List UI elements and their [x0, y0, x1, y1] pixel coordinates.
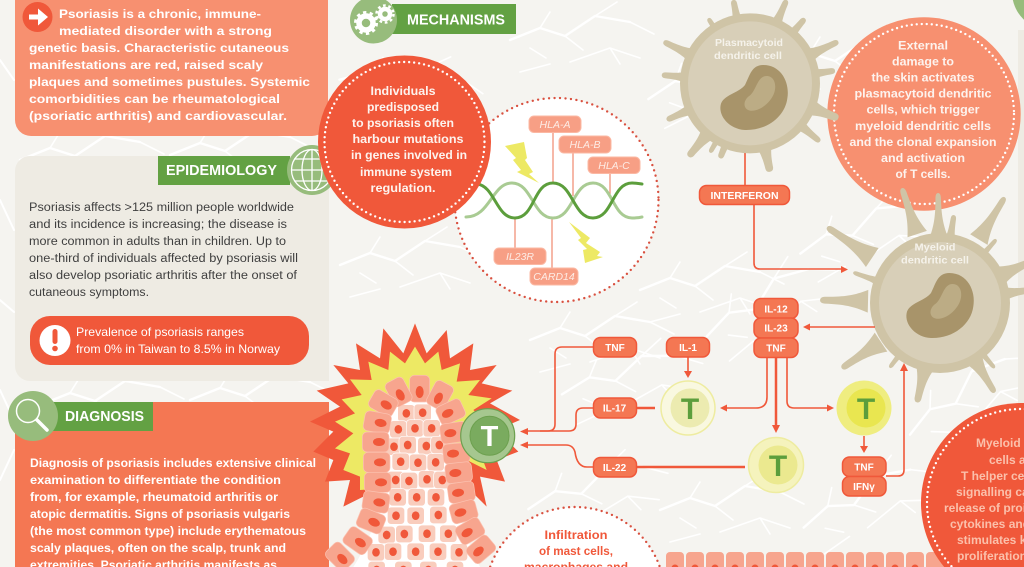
- icon: globe: [287, 145, 337, 195]
- callout: external damage: and activation: [881, 151, 965, 165]
- intro text: [29, 7, 310, 123]
- icon: magnifier: [8, 391, 58, 441]
- cytokine labels: TNF: [766, 344, 786, 354]
- T cell: bright: [836, 380, 892, 436]
- callout: external damage: [827, 17, 1021, 211]
- cytokine labels: [594, 298, 886, 496]
- gene labels: HLA-A: [540, 119, 570, 131]
- panel: diagnosis: [15, 402, 329, 567]
- callout: external damage: cells, which trigger: [866, 102, 980, 116]
- epidemiology text: Psoriasis affects >125 million people worldwide: [29, 202, 294, 214]
- skin layer: bottom row: [666, 552, 944, 567]
- cytokine labels: IL-23: [764, 324, 788, 334]
- epidemiology text: also develop psoriatic arthritis after the onset of: [29, 270, 298, 282]
- T cell: medium: [748, 438, 804, 492]
- gene labels: HLA-C: [598, 160, 630, 172]
- callout: prevalence: [30, 316, 309, 365]
- myeloid dendritic cell: Myeloid: [914, 242, 956, 254]
- intro text: genetic basis. Characteristic cutaneous: [29, 41, 289, 55]
- plasmacytoid dendritic cell: dendritic cell: [714, 50, 782, 62]
- DNA helix: [466, 183, 642, 218]
- cytokine labels: TNF: [854, 462, 874, 474]
- callout: external damage: damage to: [892, 54, 954, 68]
- myeloid dendritic cell: [820, 185, 1024, 405]
- heading: diagnosis: DIAGNOSIS: [65, 408, 144, 425]
- callout: infiltration: Infiltration: [544, 530, 608, 542]
- panel: gene diagram: [454, 98, 658, 302]
- callout: individuals predisposed: regulation.: [370, 181, 436, 195]
- T cell: medium: T: [769, 450, 787, 483]
- lightning bolts: [505, 142, 603, 263]
- icon: arrow: [22, 2, 52, 32]
- callout: myeloid activation: [921, 403, 1024, 567]
- cytokine labels: TNF: [605, 343, 625, 354]
- intro text: manifestations are red, raised scaly: [29, 58, 263, 72]
- cytokine labels: IL-17: [603, 404, 627, 414]
- right edge panel: [1012, 0, 1024, 567]
- icon: exclamation: [40, 325, 70, 356]
- intro text: (psoriatic arthritis) and cardiovascular.: [29, 109, 287, 123]
- T cell: pale: [661, 381, 715, 435]
- callout: external damage: plasmacytoid dendritic: [854, 86, 992, 100]
- callout: individuals predisposed: [318, 56, 491, 228]
- epidemiology text: and its incidence is increasing; the disease is: [29, 219, 287, 231]
- callout: individuals predisposed: in genes involved in: [351, 148, 467, 162]
- T cell: central: T: [481, 421, 499, 453]
- myeloid dendritic cell: dendritic cell: [901, 254, 969, 266]
- heading: mechanisms: MECHANISMS: [407, 12, 505, 28]
- callout: individuals predisposed: immune system: [360, 165, 452, 179]
- gene labels: CARD14: [533, 271, 575, 283]
- diagnosis text: from, for example, rheumatoid arthritis or: [30, 490, 278, 504]
- T cell: bright: T: [857, 393, 875, 426]
- panel: introduction: [15, 0, 328, 136]
- arrow: interferon pathway: [745, 148, 848, 273]
- cytokine labels: IL-12: [764, 304, 788, 316]
- diagnosis text: atopic dermatitis. Signs of psoriasis vulgaris: [30, 507, 290, 521]
- cytokine labels: IL-1: [679, 343, 697, 354]
- diagnosis text: Diagnosis of psoriasis includes extensive clinical: [30, 456, 316, 470]
- diagnosis text: examination to differentiate the condition: [30, 473, 281, 487]
- cytokine labels: IFNγ: [853, 482, 875, 493]
- callout: individuals predisposed: predisposed: [367, 100, 439, 114]
- diagnosis text: (the most common type) include erythematous: [30, 524, 306, 538]
- intro text: mediated disorder with a strong: [59, 24, 272, 38]
- heading: mechanisms: [350, 0, 516, 44]
- icon: gears: [350, 0, 397, 44]
- callout: individuals predisposed: Individuals: [370, 84, 436, 98]
- T cell: central: [461, 409, 515, 463]
- heading: epidemiology: [158, 156, 290, 185]
- callout: prevalence: Prevalence of psoriasis ranges: [76, 325, 244, 339]
- callout: external damage: myeloid dendritic cells: [855, 119, 991, 133]
- label: interferon: INTERFERON: [710, 191, 778, 202]
- label: interferon: [700, 186, 790, 204]
- epidemiology text: cutaneous symptoms.: [29, 287, 149, 299]
- epidermis cells: [324, 375, 498, 567]
- callout: external damage: and the clonal expansion: [850, 135, 996, 149]
- epidemiology text: one-third of individuals affected by psoriasis will: [29, 253, 298, 265]
- callout: individuals predisposed: to psoriasis often: [352, 116, 454, 130]
- intro text: Psoriasis is a chronic, immune-: [59, 7, 261, 21]
- arrows: cytokine network: [520, 324, 908, 476]
- callout: external damage: the skin activates: [872, 70, 975, 84]
- plasmacytoid dendritic cell: Plasmacytoid: [715, 37, 783, 49]
- callout: external damage: of T cells.: [896, 167, 950, 181]
- callout: infiltration: of mast cells,: [539, 546, 613, 558]
- intro text: comorbidities can be rheumatological: [29, 92, 280, 106]
- epidemiology text: [29, 202, 298, 299]
- callout: external damage: External: [898, 38, 948, 52]
- callout: prevalence: from 0% in Taiwan to 8.5% in Norway: [76, 342, 280, 356]
- panel: epidemiology: [15, 156, 329, 381]
- epidemiology text: more common in adults than in children. Up to: [29, 236, 286, 248]
- gene connector lines: [515, 132, 610, 268]
- heading: epidemiology: EPIDEMIOLOGY: [166, 162, 277, 179]
- diagnosis text: scaly plaques, often on the scalp, trunk and: [30, 541, 286, 555]
- cytokine labels: IL-22: [603, 463, 627, 474]
- heading: diagnosis: [53, 402, 153, 431]
- T cell: pale: T: [681, 393, 699, 426]
- plasmacytoid dendritic cell: [659, 0, 843, 175]
- intro text: plaques and sometimes pustules. Systemic: [29, 75, 310, 89]
- callout: individuals predisposed: harbour mutations: [352, 132, 464, 146]
- diagnosis text: [30, 456, 316, 567]
- callout: infiltration: [485, 507, 665, 567]
- gene labels: [494, 116, 640, 285]
- burst: inflammation: [310, 323, 520, 520]
- gene labels: HLA-B: [570, 139, 600, 151]
- gene labels: IL23R: [506, 251, 534, 263]
